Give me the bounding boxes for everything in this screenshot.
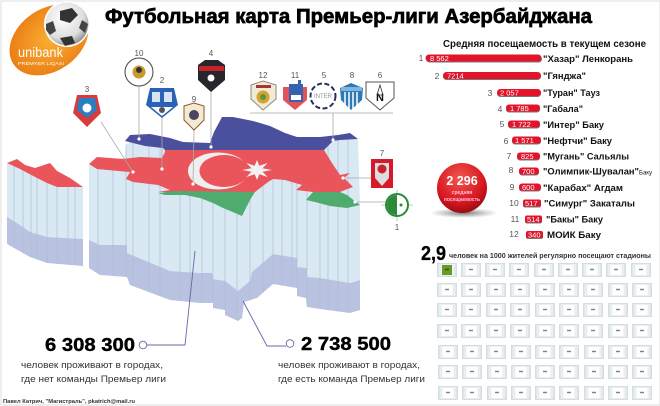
row 4 Gabala: 4 <box>498 104 503 114</box>
row 11 Baku <box>511 214 604 226</box>
badge 8 Olimpik-Shuvalan: 8 <box>350 71 355 80</box>
badge 6 Neftchi: N <box>376 92 384 104</box>
average attendance sphere: средняя <box>452 190 472 196</box>
logo: Unibank Premier League: unibank <box>18 45 63 60</box>
row 8 Olimpik: 8 <box>509 165 514 175</box>
average attendance sphere: посещаемость <box>444 197 480 203</box>
average attendance sphere: 2 296 <box>446 174 478 188</box>
badge connector lines <box>101 86 393 204</box>
badge 6 Neftchi: 6 <box>378 71 383 80</box>
row 8 Olimpik: "Олимпик-Шувалан"Баку <box>543 166 652 178</box>
badge 2 Ganja <box>146 76 178 118</box>
row 3 Turan <box>488 88 600 99</box>
map: red flag stripe <box>89 150 353 192</box>
row 12 MOIK <box>509 229 602 241</box>
stat: 2,9 per 1000: человек на 1000 жителей регулярно посещают стадионы <box>449 252 651 260</box>
row 9 Qarabag: 9 <box>510 182 515 192</box>
badge 6 Neftchi <box>366 71 394 110</box>
attendance chart heading: Средняя посещаемость в текущем сезоне <box>443 38 646 50</box>
row 6 Neftchi <box>504 136 613 147</box>
population callout: cities with a team <box>243 301 425 384</box>
credit: Павел Катрич, "Магистраль", pkatrich@mail.ru <box>3 399 135 405</box>
population callout: cities without a team: 6 308 300 <box>45 335 135 355</box>
row 3 Turan: 2 057 <box>500 88 519 98</box>
row 4 Gabala: 1 785 <box>510 104 529 113</box>
map: main territory extruded <box>89 117 360 330</box>
row 12 MOIK: 12 <box>509 229 519 239</box>
map: green flag stripe east <box>306 192 360 208</box>
map: green flag stripe west <box>158 191 255 216</box>
stat: 2,9 per 1000: 2,9 <box>421 243 446 265</box>
badge 3 Turan <box>73 85 101 127</box>
logo: Unibank Premier League: PREMYER LIQASI <box>18 61 64 66</box>
logo: Unibank Premier League <box>0 0 102 90</box>
badge 12 MOIK: 12 <box>259 71 268 80</box>
badge 1 Khazar Lankaran <box>381 190 413 232</box>
row 12 MOIK: МОИК Баку <box>547 230 602 241</box>
badge 10 Simurg <box>125 49 153 86</box>
row 8 Olimpik: 700 <box>522 167 535 176</box>
row 1 Khazar <box>419 53 633 65</box>
row 5 Inter: 1 722 <box>512 120 531 129</box>
badge 2 Ganja: 2 <box>160 76 165 85</box>
row 1 Khazar: 1 <box>419 53 424 63</box>
population callout: cities without a team: человек проживают в городах, <box>21 360 163 370</box>
row 2 Ganja: 2 <box>435 71 440 81</box>
badge 5 Inter <box>310 71 336 108</box>
row 4 Gabala <box>498 104 583 115</box>
row 1 Khazar: "Хазар" Ленкорань <box>543 54 633 65</box>
badge 12 MOIK <box>251 71 276 110</box>
badge 7 Khazar Sumgait: 7 <box>380 149 385 158</box>
row 9 Qarabag: 600 <box>522 183 535 192</box>
row 2 Ganja: "Гянджа" <box>543 71 586 82</box>
row 7 Mugan <box>507 151 629 162</box>
row 6 Neftchi: 1 571 <box>515 136 534 145</box>
row 2 Ganja: 7214 <box>447 72 464 80</box>
row 3 Turan: 3 <box>488 88 493 98</box>
row 9 Qarabag <box>510 182 623 194</box>
row 1 Khazar: 8 562 <box>430 54 449 63</box>
row 10 Simurg: 10 <box>509 198 519 208</box>
map: blue flag stripe <box>125 117 358 150</box>
badge 8 Olimpik-Shuvalan <box>340 71 363 110</box>
row 11 Baku: 514 <box>527 215 540 224</box>
population callout: cities with a team: человек проживают в городах, <box>278 360 420 370</box>
row 11 Baku: "Бакы" Баку <box>546 214 604 226</box>
row 10 Simurg <box>509 198 635 210</box>
badge 11 Baku <box>283 71 307 110</box>
map: left exclave (Nakhchivan) <box>7 159 83 270</box>
population callout: cities without a team <box>21 251 195 384</box>
row 6 Neftchi: "Нефтчи" Баку <box>543 136 613 147</box>
row 12 MOIK: 340 <box>528 230 541 240</box>
row 7 Mugan: 825 <box>521 152 534 161</box>
row 8 Olimpik <box>509 165 652 178</box>
badge 9 Qarabag <box>184 95 204 130</box>
row 10 Simurg: 517 <box>525 199 538 208</box>
badge 5 Inter: INTER <box>314 94 333 100</box>
pictogram grid: stadium seats <box>437 263 652 400</box>
badge 5 Inter: 5 <box>322 71 327 80</box>
population callout: cities with a team: 2 738 500 <box>301 334 391 354</box>
row 6 Neftchi: 6 <box>504 136 509 146</box>
row 2 Ganja <box>435 71 586 82</box>
attendance bar chart <box>419 53 652 241</box>
row 4 Gabala: "Габала" <box>543 104 583 115</box>
badge 3 Turan: 3 <box>85 85 90 94</box>
row 10 Simurg: "Симург" Закаталы <box>544 198 635 210</box>
row 9 Qarabag: "Карабах" Агдам <box>543 183 623 194</box>
row 5 Inter <box>500 119 605 131</box>
row 5 Inter: 5 <box>500 119 505 129</box>
row 7 Mugan: 7 <box>507 151 512 161</box>
row 3 Turan: "Туран" Тауз <box>543 88 600 99</box>
highlighted green seat <box>442 265 452 275</box>
population callout: cities without a team: где нет команды Премьер лиги <box>21 374 166 384</box>
badge 9 Qarabag: 9 <box>192 95 197 104</box>
badge 4 Gabala <box>198 49 225 92</box>
row 7 Mugan: "Мугань" Сальялы <box>543 152 629 162</box>
row 11 Baku: 11 <box>511 214 520 224</box>
title: Футбольная карта Премьер-лиги Азербайджана <box>105 6 593 28</box>
badge 10 Simurg: 10 <box>135 49 144 58</box>
flag star <box>242 160 272 180</box>
population callout: cities with a team: где есть команда Премьер лиги <box>278 374 425 384</box>
flag crescent <box>188 152 248 190</box>
badge 4 Gabala: 4 <box>209 49 214 58</box>
badge 11 Baku: 11 <box>291 71 300 80</box>
badge 1 Khazar Lankaran: 1 <box>395 223 400 232</box>
stat: 2,9 per 1000 <box>421 243 651 265</box>
average attendance sphere <box>430 163 498 218</box>
badge 7 Khazar Sumgait <box>371 149 393 188</box>
row 5 Inter: "Интер" Баку <box>543 120 605 131</box>
